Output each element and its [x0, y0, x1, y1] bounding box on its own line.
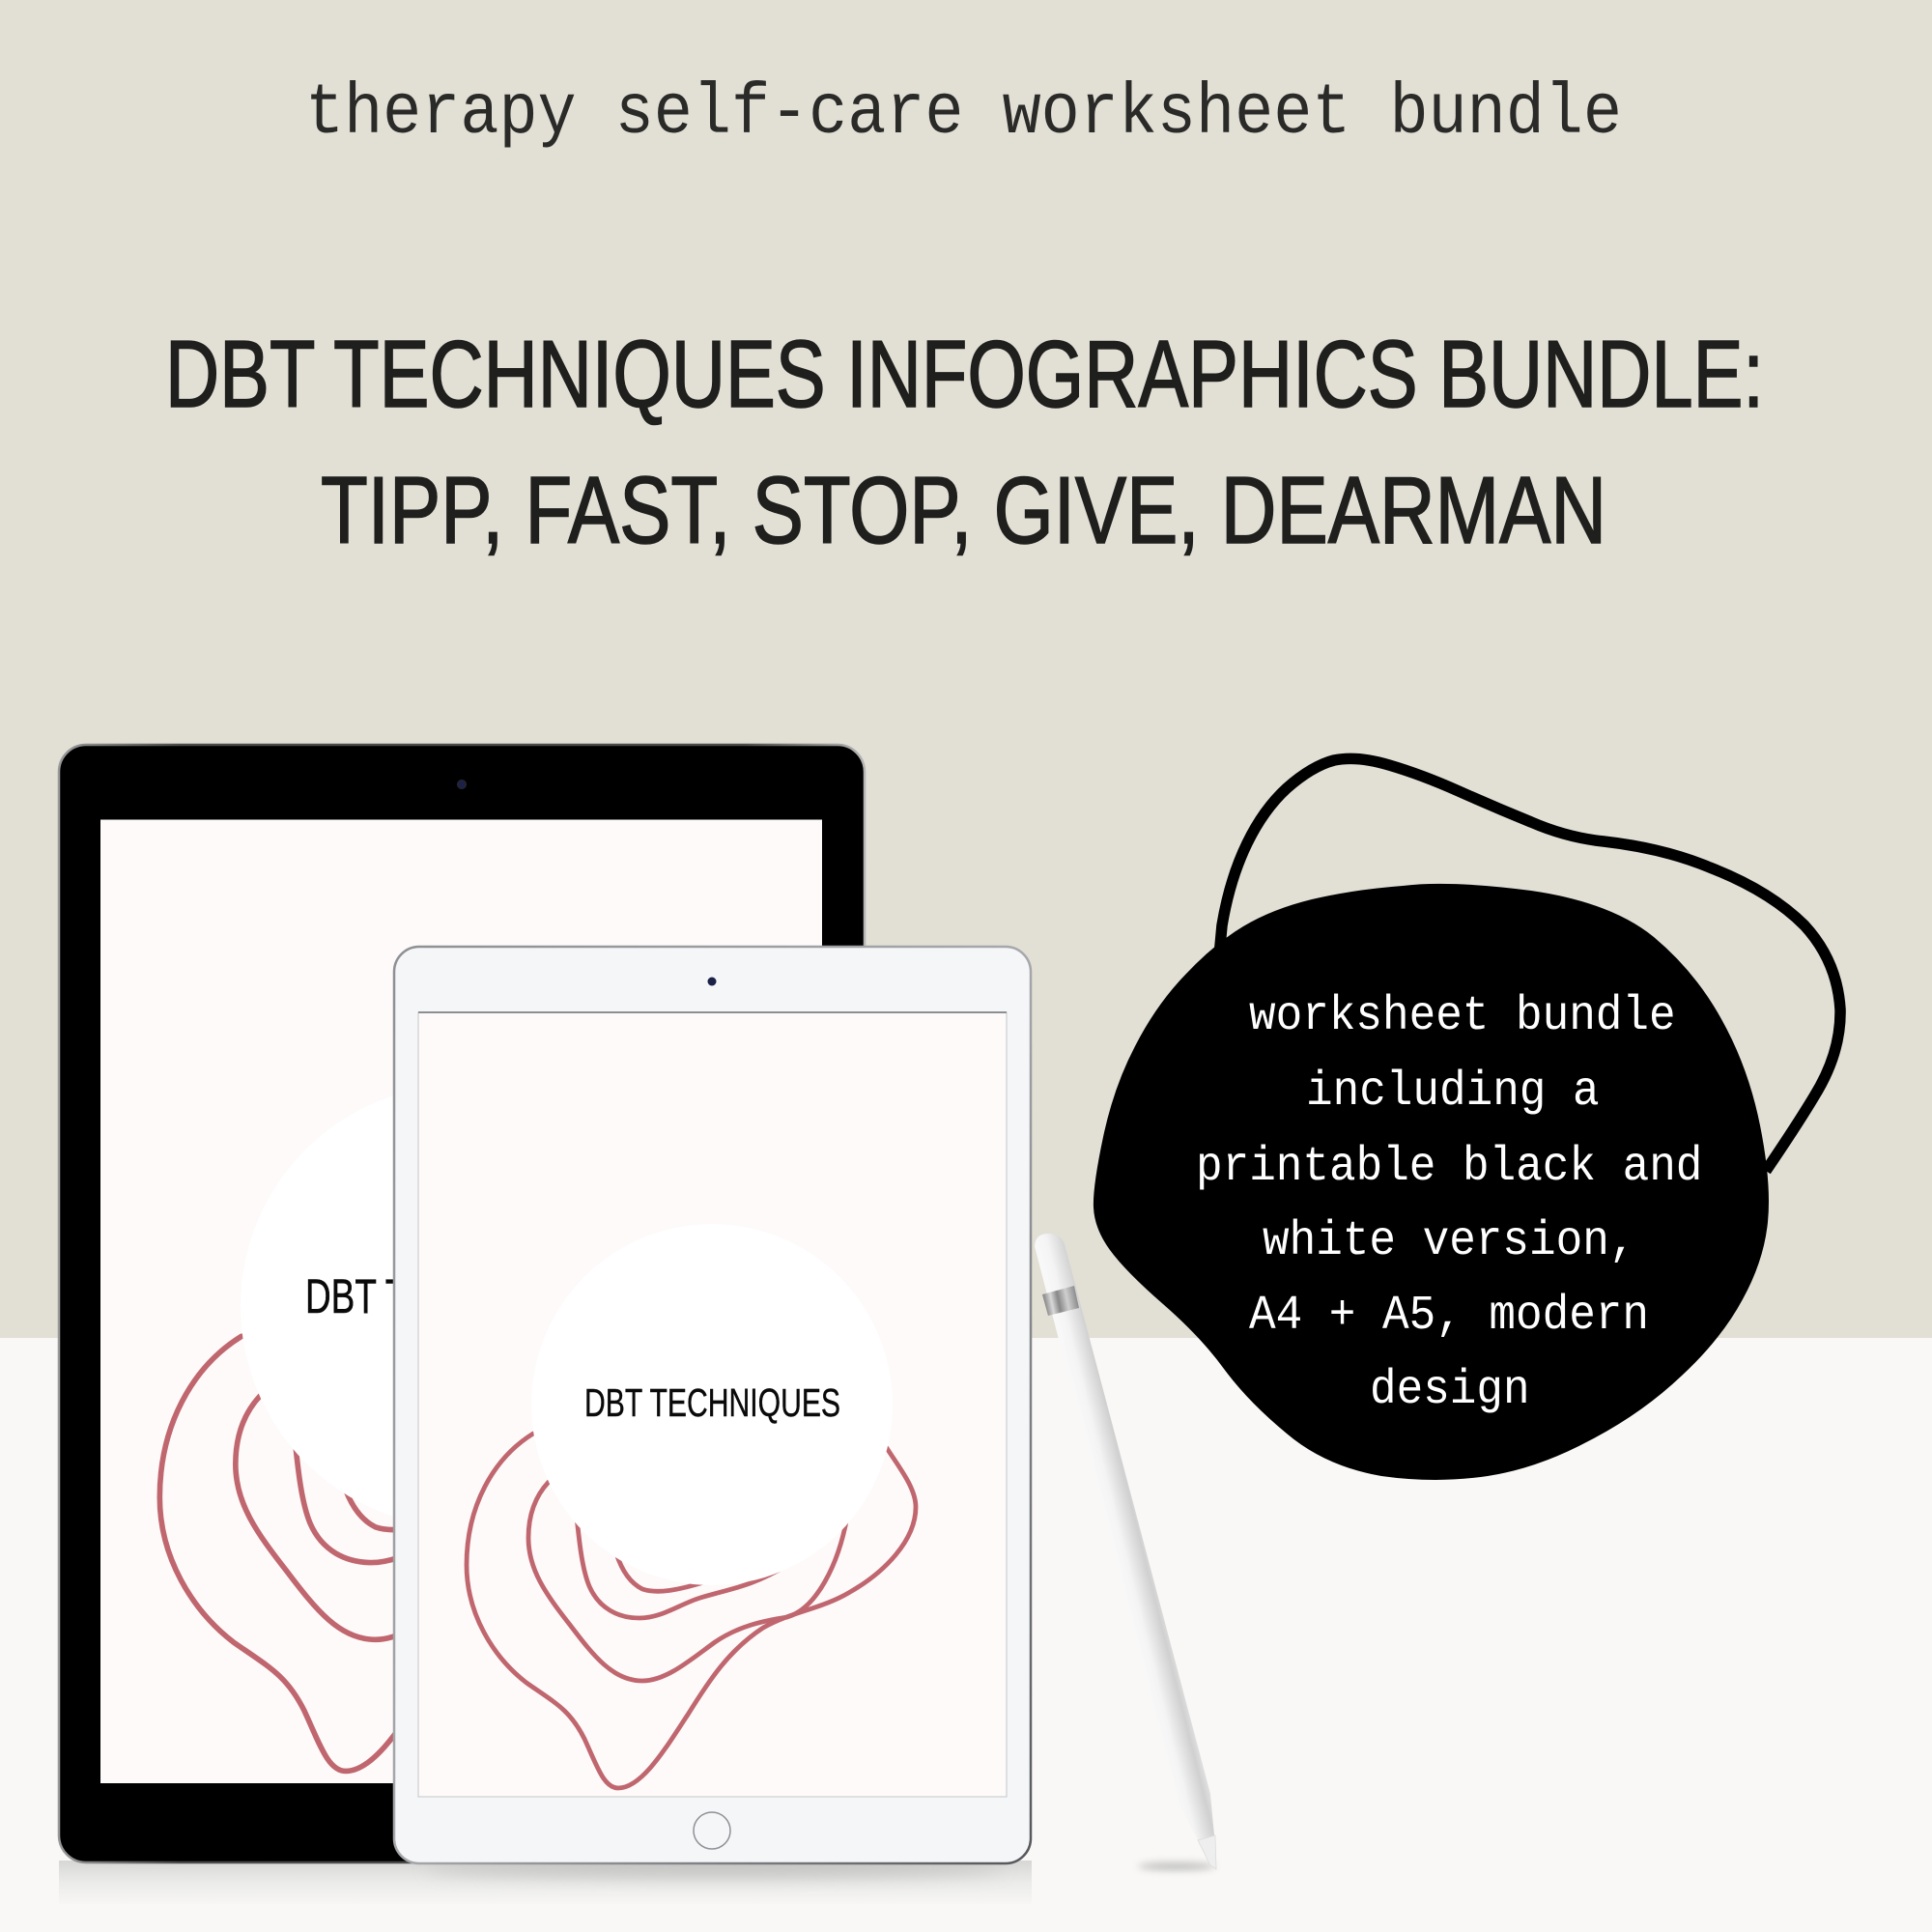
- front tablet rose contour lines: [467, 1434, 916, 1788]
- front tablet label: DBT TECHNIQUES: [584, 1380, 840, 1425]
- front tablet camera: [707, 978, 717, 985]
- background: upper beige panel: [0, 0, 1932, 1338]
- callout text: design: [1370, 1363, 1530, 1418]
- callout text: including a: [1306, 1065, 1600, 1120]
- back tablet screen: [100, 819, 822, 1783]
- icon: stylus pencil: [1035, 1234, 1216, 1869]
- front tablet white circle: [531, 1224, 893, 1585]
- callout text: worksheet bundle: [1249, 989, 1676, 1044]
- back tablet rose contour lines: [159, 1336, 711, 1771]
- stylus shadow: [1138, 1862, 1215, 1870]
- front tablet home button: [694, 1812, 730, 1849]
- title: TIPP, FAST, STOP, GIVE, DEARMAN: [321, 457, 1606, 563]
- stylus metal band: [1042, 1286, 1079, 1316]
- front tablet screen top edge: [418, 1011, 1007, 1013]
- stylus nib: [1198, 1835, 1216, 1869]
- tablet: black back tablet: [59, 745, 865, 1862]
- callout: black blob with description: [1094, 884, 1769, 1480]
- tablet: white front tablet: [394, 947, 1031, 1863]
- title: [165, 321, 1764, 563]
- back tablet label: DBT TECHNIQUES: [305, 1269, 619, 1323]
- back tablet camera: [458, 781, 466, 788]
- front tablet screen: [418, 1012, 1007, 1797]
- back tablet white circle: [241, 1085, 683, 1527]
- callout text: [1196, 989, 1702, 1418]
- callout text: printable black and: [1196, 1140, 1702, 1195]
- callout text: A4 + A5, modern: [1249, 1289, 1649, 1344]
- callout: blob outline: [1219, 758, 1840, 1171]
- tablet shadow: [59, 1860, 1032, 1904]
- callout text: white version,: [1263, 1214, 1635, 1269]
- subtitle: therapy self-care worksheet bundle: [305, 73, 1622, 155]
- background: lower off-white panel: [0, 1338, 1932, 1932]
